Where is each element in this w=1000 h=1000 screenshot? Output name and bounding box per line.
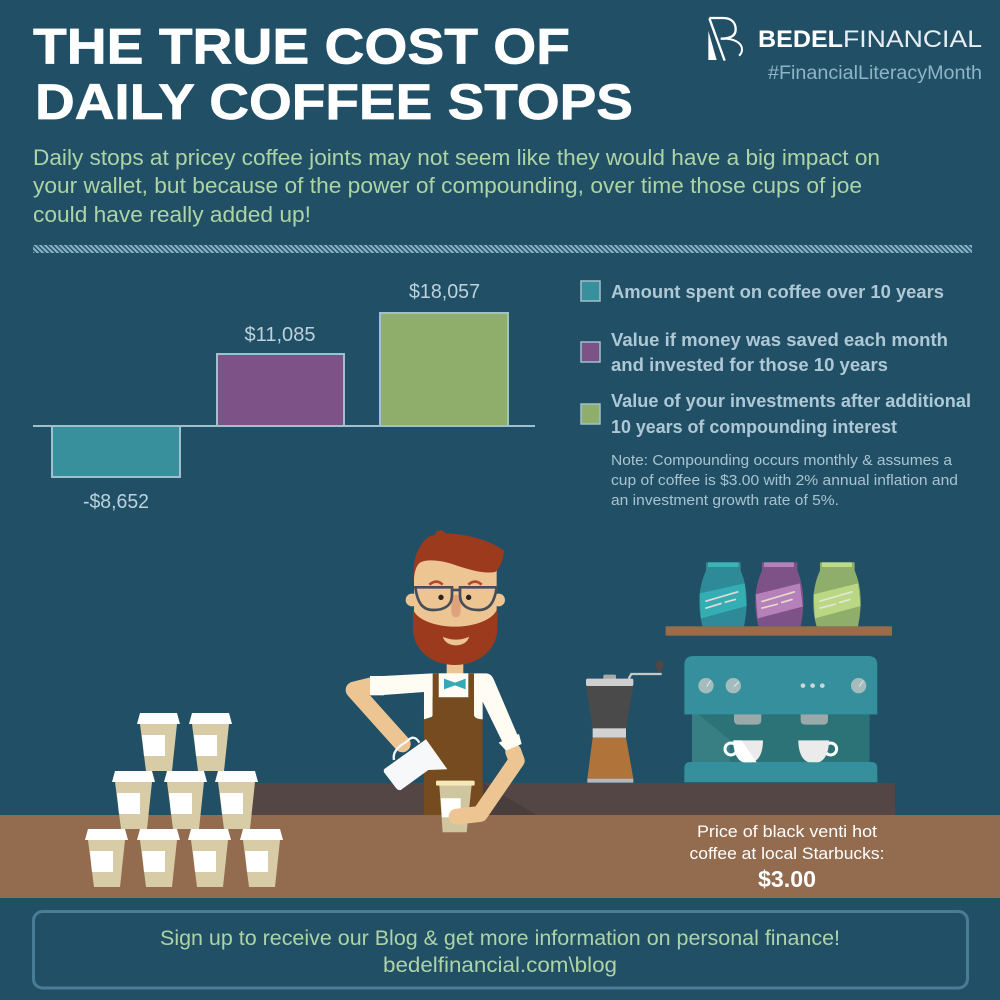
stack of coffee cups xyxy=(85,713,283,887)
front counter xyxy=(0,815,1000,898)
logo: Bedel Financial: FINANCIAL xyxy=(843,26,982,53)
apron xyxy=(424,673,483,815)
intro text: could have really added up! xyxy=(33,202,311,227)
face xyxy=(414,558,497,628)
footer call to action xyxy=(34,912,968,988)
intro text: Daily stops at pricey coffee joints may not seem like they would have a big impact on xyxy=(33,145,880,170)
note: an investment growth rate of 5%. xyxy=(611,493,839,509)
legend: Amount spent on coffee over 10 years xyxy=(611,281,944,302)
bar: amount spent xyxy=(52,426,180,477)
bag: teal xyxy=(699,562,747,626)
back counter xyxy=(250,783,895,815)
right arm xyxy=(457,752,517,817)
illustration: coffee grinder, shelf and espresso machine xyxy=(586,562,892,783)
intro text xyxy=(33,145,880,227)
logo: Bedel Financial: BEDEL xyxy=(758,26,843,53)
bag: green xyxy=(813,562,861,626)
hair xyxy=(414,530,504,578)
intro text: your wallet, but because of the power of compounding, over time those cups of joe xyxy=(33,173,862,198)
price callout: coffee at local Starbucks: xyxy=(690,844,884,863)
bowtie xyxy=(444,679,466,689)
legend swatch: green xyxy=(581,404,600,424)
smile xyxy=(443,637,469,645)
title: DAILY COFFEE STOPS xyxy=(35,74,633,130)
bar: after 20 years xyxy=(380,313,508,426)
legend: Value of your investments after additional xyxy=(611,390,971,411)
note xyxy=(611,453,958,509)
footer call to action: bedelfinancial.com\blog xyxy=(383,953,617,977)
price callout: $3.00 xyxy=(758,866,816,892)
legend: 10 years of compounding interest xyxy=(611,416,897,437)
title xyxy=(33,18,633,130)
ears xyxy=(406,594,505,606)
neck xyxy=(447,660,463,680)
shelf xyxy=(666,626,892,636)
title: THE TRUE COST OF xyxy=(33,18,570,74)
label: $11,085: $11,085 xyxy=(244,324,316,346)
legend swatch: teal xyxy=(581,281,600,301)
price callout: Price of black venti hot xyxy=(697,822,877,841)
illustration: barista xyxy=(354,530,537,832)
legend swatch: purple xyxy=(581,342,600,362)
icon: Bedel R mark xyxy=(708,18,742,61)
beard xyxy=(413,608,497,665)
pitcher xyxy=(384,738,447,790)
eyebrows xyxy=(429,582,482,585)
bag: purple xyxy=(755,562,803,626)
footer call to action: Sign up to receive our Blog & get more information on personal finance! xyxy=(160,926,840,950)
note: Note: Compounding occurs monthly & assumes a xyxy=(611,453,953,469)
glasses xyxy=(415,587,497,610)
front cup xyxy=(436,781,475,832)
note: cup of coffee is $3.00 with 2% annual inflation and xyxy=(611,473,958,489)
nose xyxy=(451,595,461,617)
left arm xyxy=(354,686,402,744)
bar chart xyxy=(33,281,535,513)
coffee grinder xyxy=(586,661,663,783)
label: $18,057: $18,057 xyxy=(409,281,480,303)
shirt xyxy=(370,673,521,751)
legend xyxy=(581,281,971,437)
logo: Bedel Financial: #FinancialLiteracyMonth xyxy=(768,63,982,84)
eyes xyxy=(438,595,471,600)
label: -$8,652: -$8,652 xyxy=(83,491,149,513)
espresso machine xyxy=(684,656,877,782)
price callout xyxy=(690,822,884,892)
legend: and invested for those 10 years xyxy=(611,354,888,375)
legend: Value if money was saved each month xyxy=(611,329,948,350)
coffee cups on machine xyxy=(725,740,837,762)
logo: Bedel Financial xyxy=(708,18,982,84)
bar: invested 10 years xyxy=(217,354,344,426)
